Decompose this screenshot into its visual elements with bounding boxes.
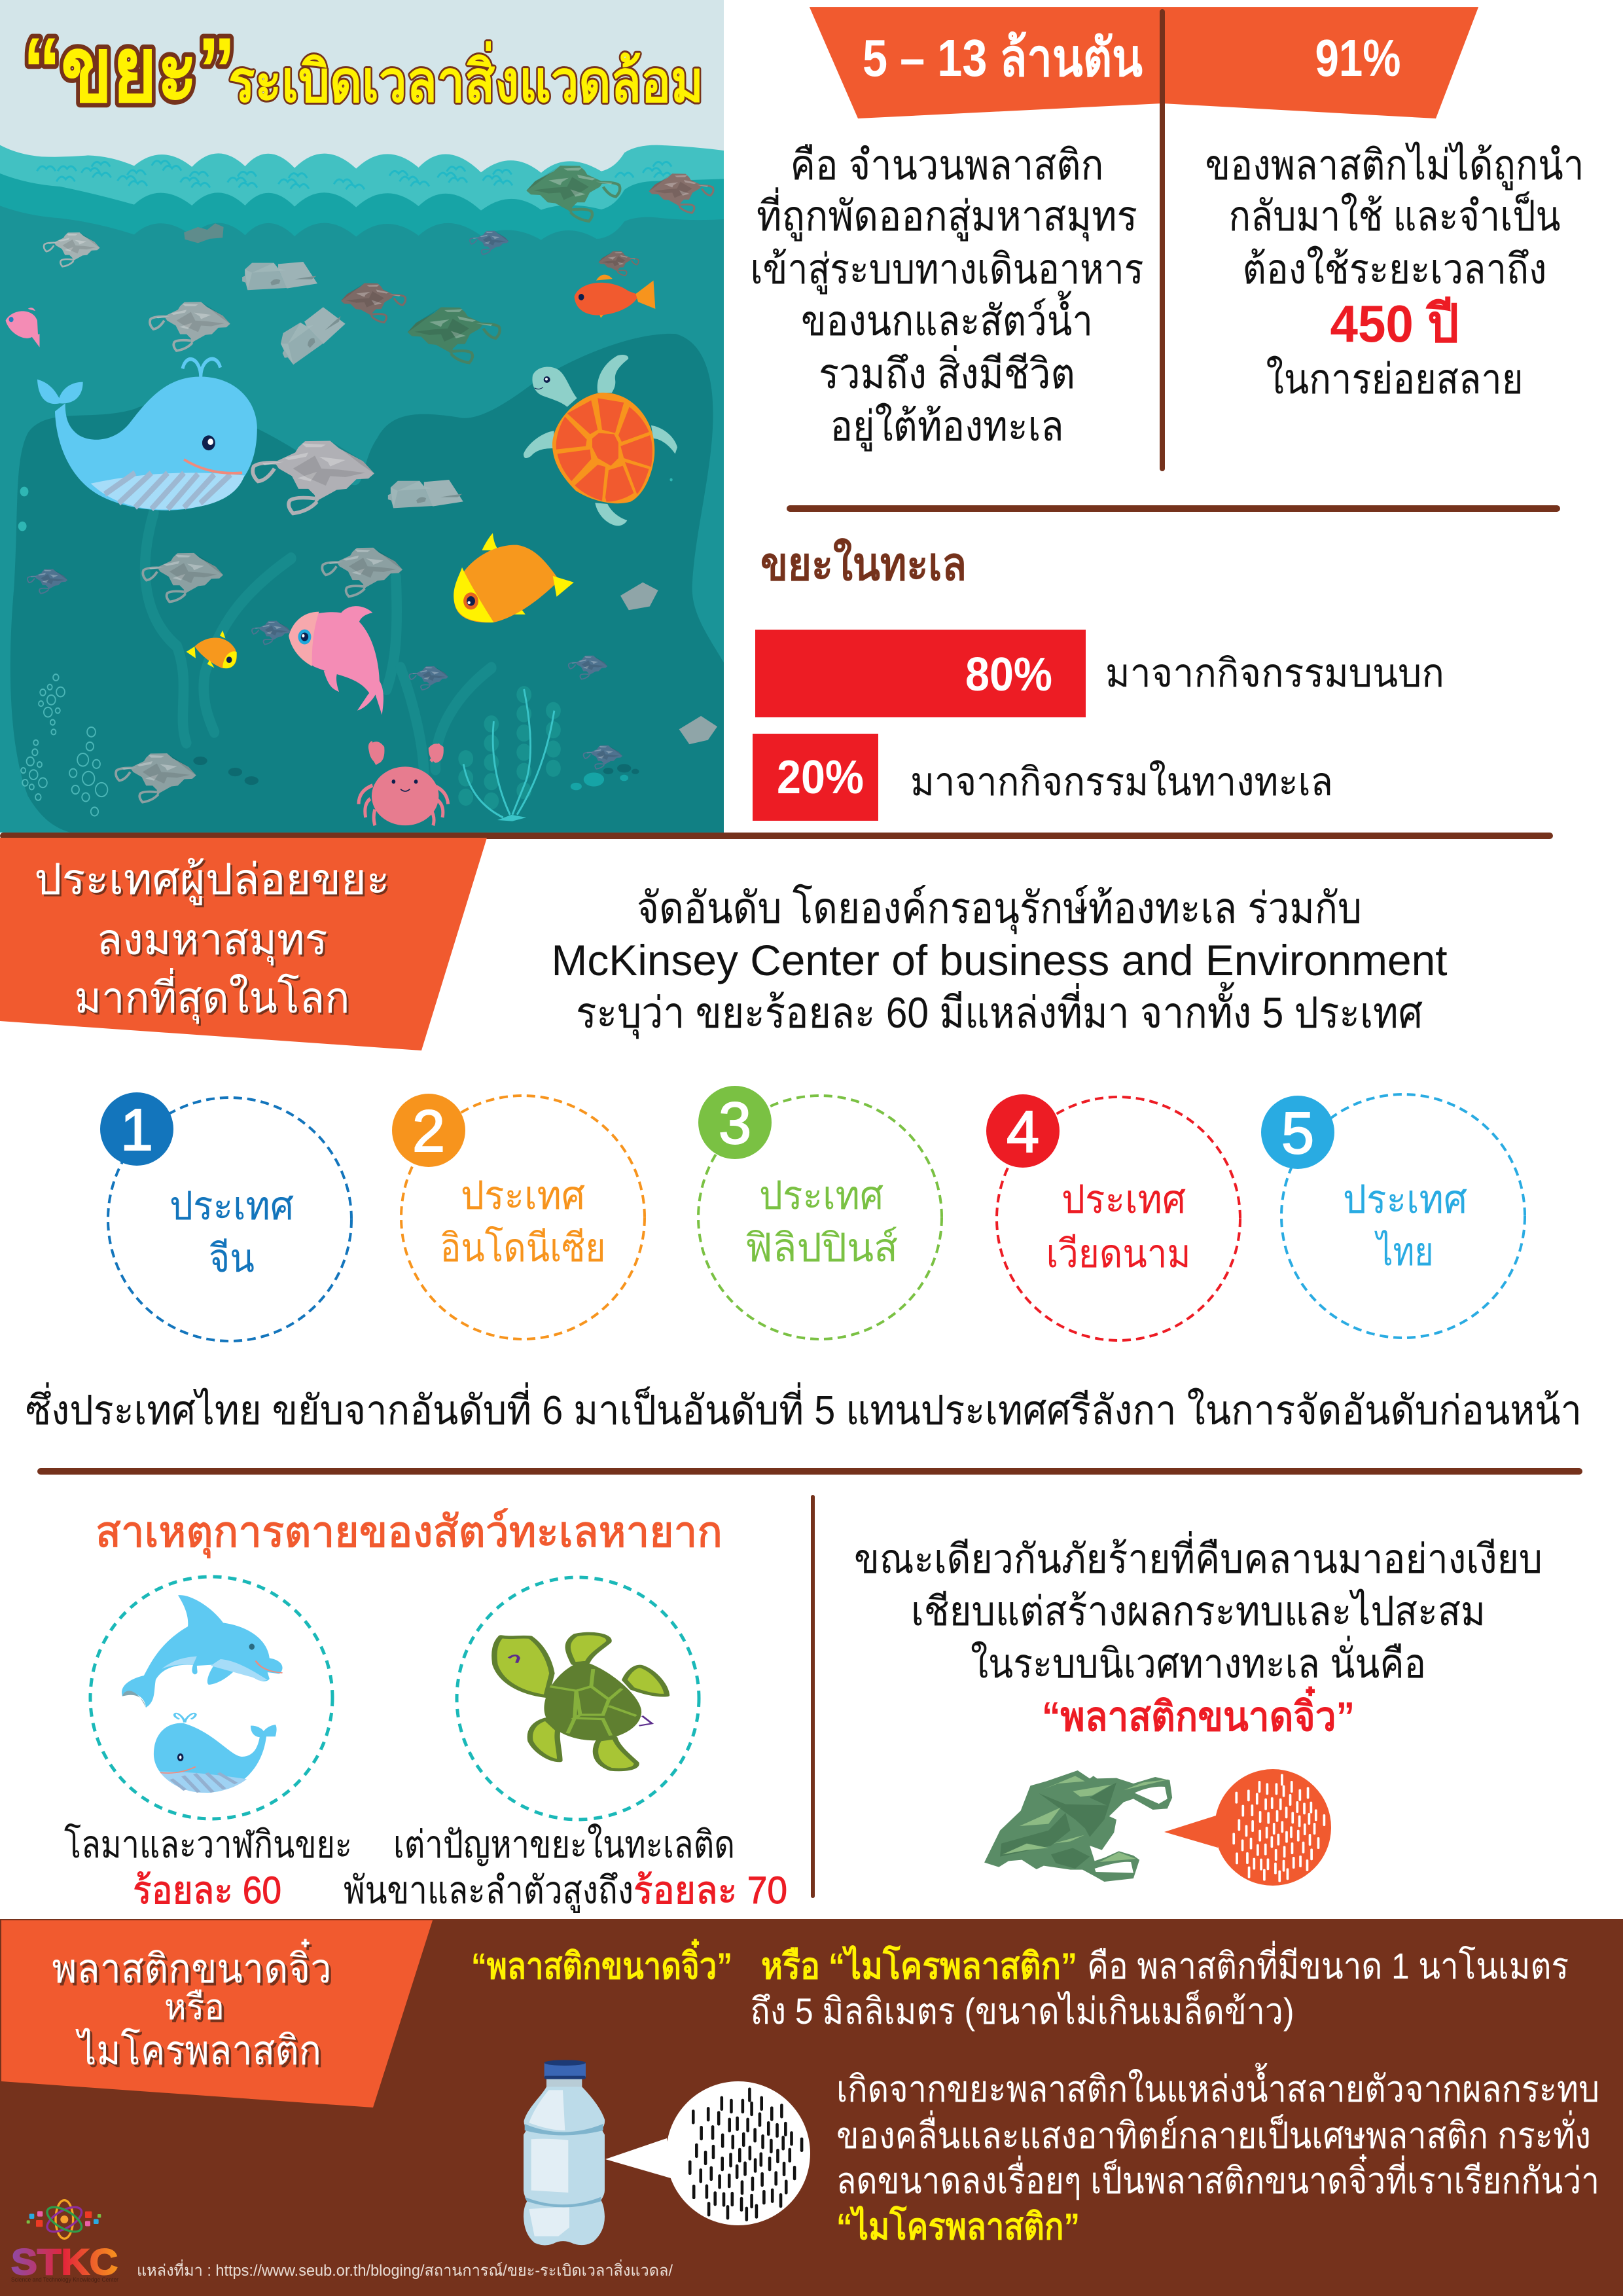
text block: plastic amount: [750, 141, 1144, 452]
icon: magnified microplastic bubble: [1164, 1769, 1331, 1886]
text block: definition: หรือ: [761, 1945, 820, 1986]
banner: microplastics: ไมโครพลาสติก: [75, 2028, 321, 2073]
text block: silent threat: ในระบบนิเวศทางทะเล นั่นคือ: [971, 1636, 1426, 1687]
background seaweed: [145, 513, 491, 775]
text block: silent threat: [854, 1531, 1543, 1740]
icon circle: turtle: [457, 1577, 699, 1820]
bar: marine 20%: มาจากกิจกรรมในทางทะเล: [910, 760, 1333, 804]
banner: top polluting countries: [0, 838, 487, 1050]
text block: silent threat: “พลาสติกขนาดจิ๋ว”: [1042, 1686, 1355, 1740]
icon: orange fish: [454, 533, 574, 622]
text block: definition: “พลาสติกขนาดจิ๋ว”: [471, 1939, 732, 1986]
icon: plastic bags: [27, 166, 713, 802]
text block: how microplastics form: [836, 2063, 1599, 2247]
text block: plastic amount: คือ จำนวนพลาสติก: [791, 141, 1103, 188]
panel: ocean illustration: [0, 0, 724, 833]
logo: STKC: STKC: [11, 2241, 118, 2282]
logo: STKC: Science and Technology Knowledge Center: [11, 2276, 118, 2283]
icon: magnified microplastic bubble: [605, 2081, 810, 2225]
ranking 2: Indonesia: ประเทศ: [461, 1174, 585, 1217]
icon: small orange fish: [187, 630, 237, 668]
text block: not recycled: 450 ปี: [1330, 295, 1459, 353]
icon: foam boxes: [184, 223, 717, 744]
ranking 4: Vietnam: 4: [1007, 1100, 1039, 1165]
logo: STKC: [11, 2200, 118, 2283]
bar: land 80%: มาจากกิจกรรมบนบก: [1105, 651, 1444, 695]
text block: plastic amount: ของนกและสัตว์น้ำ: [801, 291, 1093, 344]
text block: not recycled: ในการย่อยสลาย: [1266, 355, 1524, 403]
ranking 3: Philippines: [698, 1086, 942, 1339]
ranking 4: Vietnam: [986, 1094, 1240, 1340]
text block: ranking source: McKinsey Center of business and Environment: [551, 936, 1448, 984]
ranking 2: Indonesia: อินโดนีเซีย: [440, 1225, 606, 1270]
text block: definition: ถึง 5 มิลลิเมตร (ขนาดไม่เกินเมล็ดข้าว): [750, 1989, 1294, 2032]
text block: not recycled: ของพลาสติกไม่ได้ถูกนำ: [1205, 141, 1584, 190]
ranking 1: China: จีน: [209, 1236, 255, 1280]
title: ระเบิดเวลาสิ่งแวดล้อม: [228, 41, 704, 114]
text block: definition: คือ พลาสติกที่มีขนาด 1 นาโนเมตร: [1087, 1941, 1569, 1986]
ranking 5: Thailand: ไทย: [1374, 1229, 1433, 1274]
banner: top polluting countries: ลงมหาสมุทร: [97, 915, 327, 966]
icon: pink fish: [289, 606, 383, 715]
bar: marine 20%: 20%: [777, 751, 864, 804]
text block: plastic amount: เข้าสู่ระบบทางเดินอาหาร: [750, 245, 1144, 295]
text block: ranking source: ระบุว่า ขยะร้อยละ 60 มีแหล่งที่มา จากทั้ง 5 ประเทศ: [576, 982, 1423, 1039]
text block: ranking source: [551, 884, 1448, 1039]
ocean contents: [6, 166, 717, 825]
caption: turtles: เต่าปัญหาขยะในทะเลติด: [393, 1823, 735, 1866]
text block: silent threat: เชียบแต่สร้างผลกระทบและไปสะสม: [911, 1588, 1486, 1634]
text block: silent threat: ขณะเดียวกันภัยร้ายที่คืบคลานมาอย่างเงียบ: [854, 1531, 1543, 1582]
banner: microplastics: พลาสติกขนาดจิ๋ว: [52, 1939, 331, 1992]
text block: not recycled: [1205, 141, 1584, 403]
icon: crab: [359, 742, 448, 825]
title: “ขยะ”: [23, 18, 236, 121]
ranking 3: Philippines: 3: [719, 1091, 751, 1157]
caption: dolphins and whales: [64, 1823, 352, 1912]
icon circle: dolphin and whale: [90, 1577, 332, 1819]
ranking 4: Vietnam: ประเทศ: [1061, 1177, 1186, 1221]
banner: key figures: 91%: [1315, 29, 1400, 87]
icon: sea turtle: [524, 355, 677, 526]
banner: microplastics: [1, 1920, 433, 2108]
ranking 2: Indonesia: [392, 1094, 645, 1339]
text block: plastic amount: ที่ถูกพัดออกสู่มหาสมุทร: [757, 187, 1137, 242]
text block: not recycled: กลับมาใช้ และจำเป็น: [1229, 192, 1560, 240]
caption: dolphins and whales: ร้อยละ 60: [133, 1869, 281, 1912]
heading: waste in the sea: ขยะในทะเล: [760, 537, 967, 590]
heading: causes of rare marine animal deaths: สาเหตุการตายของสัตว์ทะเลหายาก: [96, 1507, 722, 1558]
banner: top polluting countries: มากที่สุดในโลก: [75, 968, 349, 1024]
icon: small pink fish: [6, 308, 39, 348]
ranking 4: Vietnam: เวียดนาม: [1046, 1232, 1191, 1276]
title: [23, 18, 704, 121]
bar: land 80%: [755, 630, 1444, 717]
banner: key figures: [810, 7, 1478, 118]
panel: microplastic definition: [0, 1919, 1623, 2296]
source credit: แหล่งที่มา : https://www.seub.or.th/bloging/สถานการณ์/ขยะ-ระเบิดเวลาสิ่งแวดล/: [137, 2259, 673, 2280]
divider line: key figures: [1160, 9, 1165, 471]
text block: plastic amount: รวมถึง สิ่งมีชีวิต: [819, 345, 1075, 397]
bar: land 80%: 80%: [965, 649, 1052, 701]
ranking 5: Thailand: ประเทศ: [1343, 1177, 1467, 1221]
caption: turtles: [344, 1823, 787, 1913]
icon: red fish: [575, 275, 655, 318]
caption: dolphins and whales: โลมาและวาฬกินขยะ: [64, 1823, 352, 1866]
bar chart: sources of sea waste: [753, 630, 1444, 821]
icon: bubbles: [21, 674, 107, 816]
bar: marine 20%: [753, 734, 1333, 821]
ranking 5: Thailand: [1261, 1094, 1525, 1338]
ranking 5: Thailand: 5: [1281, 1101, 1314, 1166]
icon: green plastic bag: [984, 1770, 1172, 1882]
text block: definition: [471, 1939, 1569, 2032]
text block: plastic amount: อยู่ใต้ท้องทะเล: [830, 403, 1064, 452]
ranking 1: China: [100, 1092, 351, 1341]
icon: sea floor stones: [18, 478, 673, 790]
text block: not recycled: ต้องใช้ระยะเวลาถึง: [1242, 245, 1547, 293]
text block: definition: “ไมโครพลาสติก”: [829, 1945, 1077, 1986]
ocean waves: [0, 145, 724, 833]
banner: microplastics: หรือ: [164, 1988, 224, 2027]
banner: key figures: 5 – 13 ล้านตัน: [863, 29, 1143, 87]
icon: plastic bottle: [524, 2060, 605, 2245]
text block: how microplastics form: “ไมโครพลาสติก”: [836, 2205, 1080, 2247]
icon: whale: [37, 359, 257, 511]
ranking 1: China: ประเทศ: [169, 1184, 294, 1228]
ranking 3: Philippines: ฟิลิปปินส์: [745, 1226, 898, 1270]
caption: turtles: พันขาและลำตัวสูงถึง: [344, 1869, 633, 1913]
text block: ranking source: จัดอันดับ โดยองค์กรอนุรักษ์ท้องทะเล ร่วมกับ: [637, 884, 1362, 935]
ranking 3: Philippines: ประเทศ: [759, 1174, 883, 1217]
caption: turtles: ร้อยละ 70: [633, 1869, 787, 1912]
icon: sea plant: [463, 689, 554, 821]
sea floor shape: [10, 334, 724, 833]
ranking 1: China: 1: [120, 1098, 153, 1163]
ranking 2: Indonesia: 2: [412, 1099, 445, 1164]
banner: top polluting countries: ประเทศผู้ปล่อยขยะ: [34, 855, 390, 906]
